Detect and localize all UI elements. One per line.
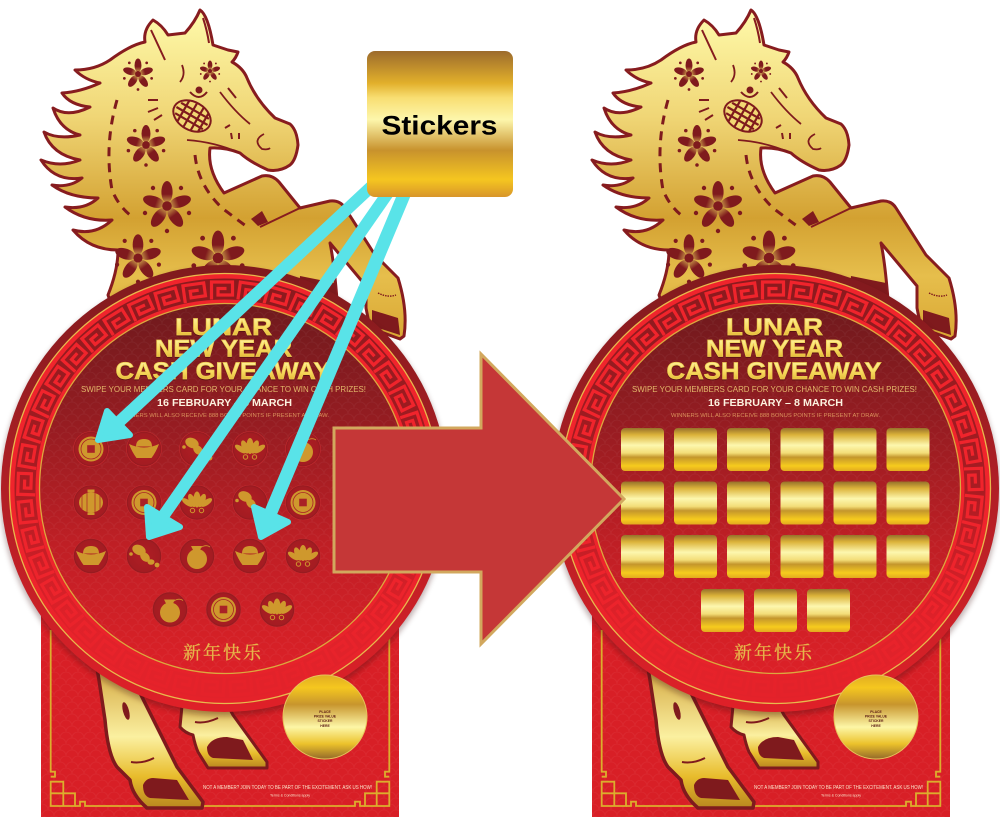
sticker label: Stickers (382, 110, 498, 140)
poster base panel (41, 590, 399, 817)
prize sticker text: STICKER (869, 719, 884, 723)
arrow: large red transition arrow (334, 354, 624, 644)
arrow: sticker to first coin (98, 186, 372, 440)
prize sticker text: PRIZE VALUE (314, 714, 337, 718)
horse lower legs (94, 650, 267, 808)
sticker swatch box (367, 51, 513, 197)
prize sticker text: PLACE (319, 710, 331, 714)
title: Lunar New Year Cash Giveaway (116, 314, 330, 385)
subtitle: swipe card: SWIPE YOUR MEMBERS CARD FOR YOUR CHANCE TO WIN CASH PRIZES! (632, 385, 917, 394)
horse upper body (41, 10, 405, 339)
prize sticker text: PRIZE VALUE (865, 714, 888, 718)
greeting in Chinese: 新年快乐 (734, 642, 814, 663)
circular badge with key border (552, 265, 1000, 716)
bonus points note: WINNERS WILL ALSO RECEIVE 888 BONUS POINTS IF PRESENT AT DRAW. (120, 413, 329, 419)
prize sticker text: STICKER (318, 719, 333, 723)
footer call to action: NOT A MEMBER? JOIN TODAY TO BE PART OF THE EXCITEMENT. ASK US HOW! (203, 785, 372, 791)
prize sticker text: HERE (320, 724, 330, 728)
horse upper body (592, 10, 956, 339)
prize sticker text (314, 710, 337, 728)
prize sticker text: PLACE (870, 710, 882, 714)
title: Lunar New Year Cash Giveaway: LUNAR (726, 314, 823, 341)
title: Lunar New Year Cash Giveaway: CASH GIVEAWAY (666, 358, 882, 385)
subtitle: swipe card: SWIPE YOUR MEMBERS CARD FOR YOUR CHANCE TO WIN CASH PRIZES! (81, 385, 366, 394)
terms note: Terms & Conditions apply (821, 794, 861, 798)
horse lower legs (645, 650, 818, 808)
date line: 16 FEBRUARY – 8 MARCH (157, 398, 292, 409)
prize sticker text: HERE (871, 724, 881, 728)
poster: before, with printed icons (0, 10, 448, 817)
circular badge with key border (0, 265, 448, 716)
gold prize sticker (834, 675, 918, 759)
bonus points note: WINNERS WILL ALSO RECEIVE 888 BONUS POINTS IF PRESENT AT DRAW. (671, 413, 880, 419)
arrow: sticker to fish icon (147, 190, 390, 537)
poster base panel (592, 590, 950, 817)
title: Lunar New Year Cash Giveaway: NEW YEAR (155, 336, 292, 362)
gold sticker grid (621, 428, 930, 632)
date line: 16 FEBRUARY – 8 MARCH (708, 398, 843, 409)
prize sticker text (865, 710, 888, 728)
poster: after, with gold stickers (552, 10, 1000, 817)
title: Lunar New Year Cash Giveaway: NEW YEAR (706, 336, 843, 362)
icon grid (74, 432, 320, 627)
greeting in Chinese: 新年快乐 (183, 642, 263, 663)
gold prize sticker (283, 675, 367, 759)
arrow: sticker to ingot icon (254, 190, 406, 537)
title: Lunar New Year Cash Giveaway: CASH GIVEAWAY (116, 358, 330, 385)
title: Lunar New Year Cash Giveaway (666, 314, 882, 385)
terms note: Terms & Conditions apply (270, 794, 310, 798)
footer call to action: NOT A MEMBER? JOIN TODAY TO BE PART OF THE EXCITEMENT. ASK US HOW! (754, 785, 923, 791)
title: Lunar New Year Cash Giveaway: LUNAR (175, 314, 272, 341)
